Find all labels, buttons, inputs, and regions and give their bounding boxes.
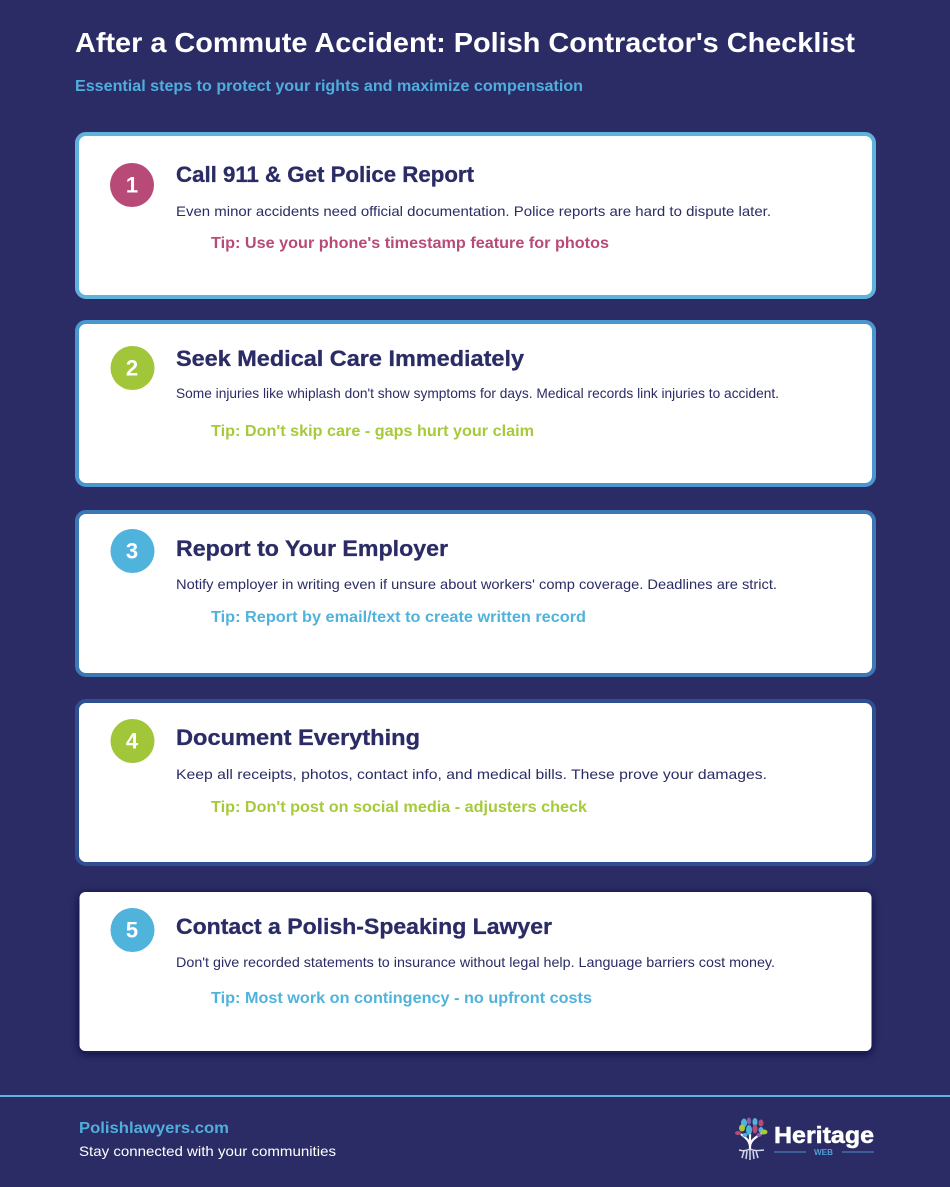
logo subtext: WEB: [814, 1147, 833, 1157]
step 4 description: Keep all receipts, photos, contact info, and medical bills. These prove your damages.: [176, 766, 767, 782]
step 4 heading: Document Everything: [176, 725, 420, 750]
footer website: Polishlawyers.com: [79, 1120, 229, 1137]
step 5 description: Don't give recorded statements to insurance without legal help. Language barriers cost money.: [176, 954, 775, 970]
step 3 description: Notify employer in writing even if unsure about workers' comp coverage. Deadlines are strict.: [176, 576, 777, 592]
step 2 number badge: 2: [126, 356, 138, 380]
logo wordmark: Heritage: [774, 1122, 874, 1148]
step 3 tip: Tip: Report by email/text to create written record: [211, 609, 586, 626]
step 2 description: Some injuries like whiplash don't show symptoms for days. Medical records link injuries to accident.: [176, 385, 779, 401]
step 1 number badge: [110, 163, 154, 207]
step 4 number badge: 4: [126, 728, 139, 754]
step 4 tip: Tip: Don't post on social media - adjusters check: [211, 799, 587, 816]
step 1 number badge: 1: [126, 172, 138, 198]
step 5 heading: Contact a Polish-Speaking Lawyer: [176, 914, 552, 939]
footer tagline: Stay connected with your communities: [79, 1143, 336, 1159]
step 2 heading: Seek Medical Care Immediately: [176, 346, 525, 371]
step 5 tip: Tip: Most work on contingency - no upfront costs: [211, 990, 592, 1007]
step 5 number badge: [110, 908, 154, 952]
icon: tree: [735, 1118, 768, 1160]
panel: step 2: [77, 322, 874, 485]
title: After a Commute Accident: Polish Contractor's Checklist: [75, 27, 855, 58]
panel: step 3: [77, 512, 874, 675]
panel: step 1: [77, 134, 874, 297]
step 2 tip: Tip: Don't skip care - gaps hurt your claim: [211, 423, 534, 440]
step 1 description: Even minor accidents need official documentation. Police reports are hard to dispute later.: [176, 203, 771, 219]
step 5 number badge: 5: [126, 918, 138, 942]
step 1 tip: Tip: Use your phone's timestamp feature for photos: [211, 235, 609, 252]
step 1 heading: Call 911 & Get Police Report: [176, 162, 475, 187]
step 2 number badge: [110, 346, 154, 390]
step 4 number badge: [110, 719, 154, 763]
step 3 number badge: [110, 529, 154, 573]
panel: step 5: [80, 892, 872, 1051]
step 3 heading: Report to Your Employer: [176, 536, 448, 561]
step 3 number badge: 3: [126, 538, 138, 564]
logo: Heritage Web: [735, 1118, 874, 1160]
subtitle: Essential steps to protect your rights and maximize compensation: [75, 78, 583, 95]
panel: step 4: [77, 701, 874, 864]
